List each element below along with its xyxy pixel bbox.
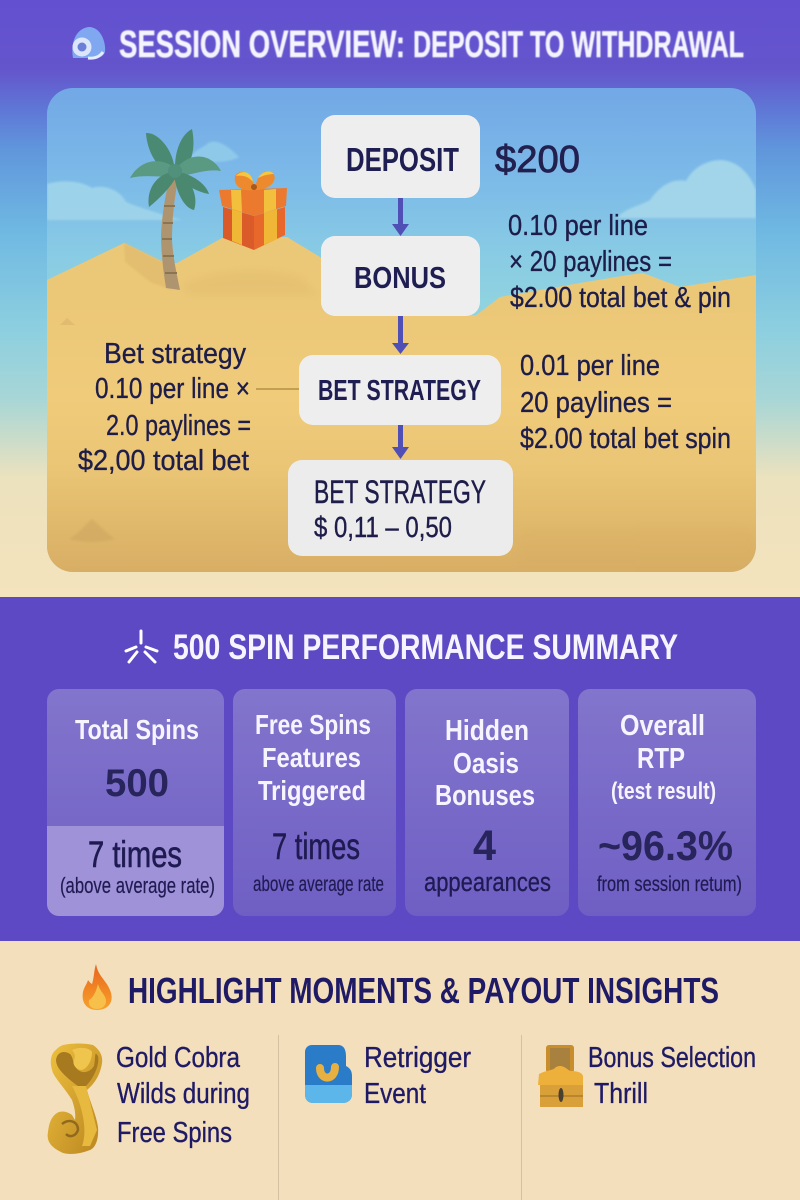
text: left bet strategy: Bet strategy	[104, 338, 246, 370]
text: left bet strategy: 2.0 paylines =	[106, 410, 251, 442]
card: overall rtp: Overall	[620, 710, 705, 742]
icon: treasure chest	[538, 1045, 583, 1107]
card: overall rtp: (test result)	[611, 778, 716, 805]
box: bet strategy range: $ 0,11 – 0,50	[314, 512, 452, 544]
heading: summary: 500 SPIN PERFORMANCE SUMMARY	[173, 628, 678, 667]
card: free spins: 7 times	[272, 826, 360, 867]
box: bonus	[321, 236, 480, 316]
text: gold cobra: Free Spins	[117, 1117, 232, 1149]
text: bonus bet details: 0.10 per line	[508, 210, 648, 242]
card: hidden oasis: Bonuses	[435, 780, 535, 812]
text: bonus bet details	[508, 210, 731, 314]
panel: desert flow	[47, 88, 756, 572]
clouds	[47, 142, 756, 220]
text: retrigger	[364, 1042, 471, 1110]
card: hidden oasis: Hidden	[445, 715, 529, 747]
icon: gold cobra	[48, 1044, 102, 1154]
text: bonus selection	[588, 1042, 756, 1110]
text: bonus bet details: × 20 paylines =	[509, 246, 672, 278]
card: free spins	[233, 689, 396, 916]
box: deposit: DEPOSIT	[346, 141, 459, 178]
text: left bet strategy: $2,00 total bet	[78, 445, 249, 477]
card: hidden oasis: appearances	[424, 867, 551, 897]
panel: highlights background	[0, 941, 800, 1200]
title: SESSION OVERVIEW:	[119, 24, 405, 66]
icon: retrigger	[305, 1045, 352, 1103]
connector line	[256, 388, 299, 390]
box: bet strategy: BET STRATEGY	[318, 375, 481, 407]
rocks	[74, 520, 111, 541]
card: overall rtp: RTP	[637, 743, 685, 775]
text: right bet details: 20 paylines =	[520, 387, 672, 419]
flow arrows	[392, 198, 409, 459]
title	[119, 24, 744, 66]
text: right bet details	[520, 350, 731, 455]
card: total spins	[47, 689, 224, 916]
top background	[0, 0, 800, 597]
text: bonus selection: Bonus Selection	[588, 1042, 756, 1074]
lower right shade	[515, 530, 756, 572]
text: gold cobra: Gold Cobra	[116, 1042, 241, 1074]
card: overall rtp: from session retum)	[597, 873, 742, 896]
card: free spins: Free Spins	[255, 709, 371, 740]
card: hidden oasis: 4	[473, 822, 496, 870]
title icon	[72, 27, 105, 58]
box: bet strategy range: BET STRATEGY	[314, 474, 486, 510]
panel: performance summary background	[0, 597, 800, 941]
text: bonus bet details: $2.00 total bet & pin	[510, 282, 731, 314]
text: right bet details: 0.01 per line	[520, 350, 660, 382]
card: free spins: above average rate	[253, 873, 384, 896]
icon: flame	[83, 964, 112, 1010]
card: total spins: Total Spins	[75, 714, 199, 745]
box: bet strategy range	[288, 460, 513, 556]
text: gold cobra: Wilds during	[117, 1078, 250, 1110]
card: free spins: Features	[262, 742, 361, 773]
text: bonus selection: Thrill	[594, 1078, 648, 1110]
amount: $200: $200	[495, 139, 580, 181]
text: retrigger: Retrigger	[364, 1042, 471, 1074]
box: deposit	[321, 115, 480, 198]
icon: gift box	[219, 171, 287, 250]
card: total spins: 500	[105, 762, 169, 805]
card: hidden oasis: Oasis	[453, 748, 519, 780]
card: overall rtp	[578, 689, 756, 916]
card: hidden oasis	[405, 689, 569, 916]
card: total spins: (above average rate)	[60, 873, 215, 898]
card: total spins: 7 times	[88, 834, 182, 875]
text: gold cobra	[116, 1042, 250, 1149]
text: left bet strategy: 0.10 per line ×	[95, 373, 250, 405]
text: right bet details: $2.00 total bet spin	[520, 423, 731, 455]
dividers	[278, 1035, 522, 1200]
card: overall rtp: ~96.3%	[598, 822, 733, 869]
card: free spins: Triggered	[258, 775, 366, 806]
box: bet strategy	[299, 355, 501, 425]
box: bonus: BONUS	[354, 260, 446, 295]
right dune	[476, 273, 756, 316]
text: left bet strategy	[78, 338, 251, 477]
icon: palm tree	[130, 129, 221, 290]
text: retrigger: Event	[364, 1078, 426, 1110]
icon: sparkle	[126, 631, 157, 662]
back dunes	[47, 237, 321, 302]
